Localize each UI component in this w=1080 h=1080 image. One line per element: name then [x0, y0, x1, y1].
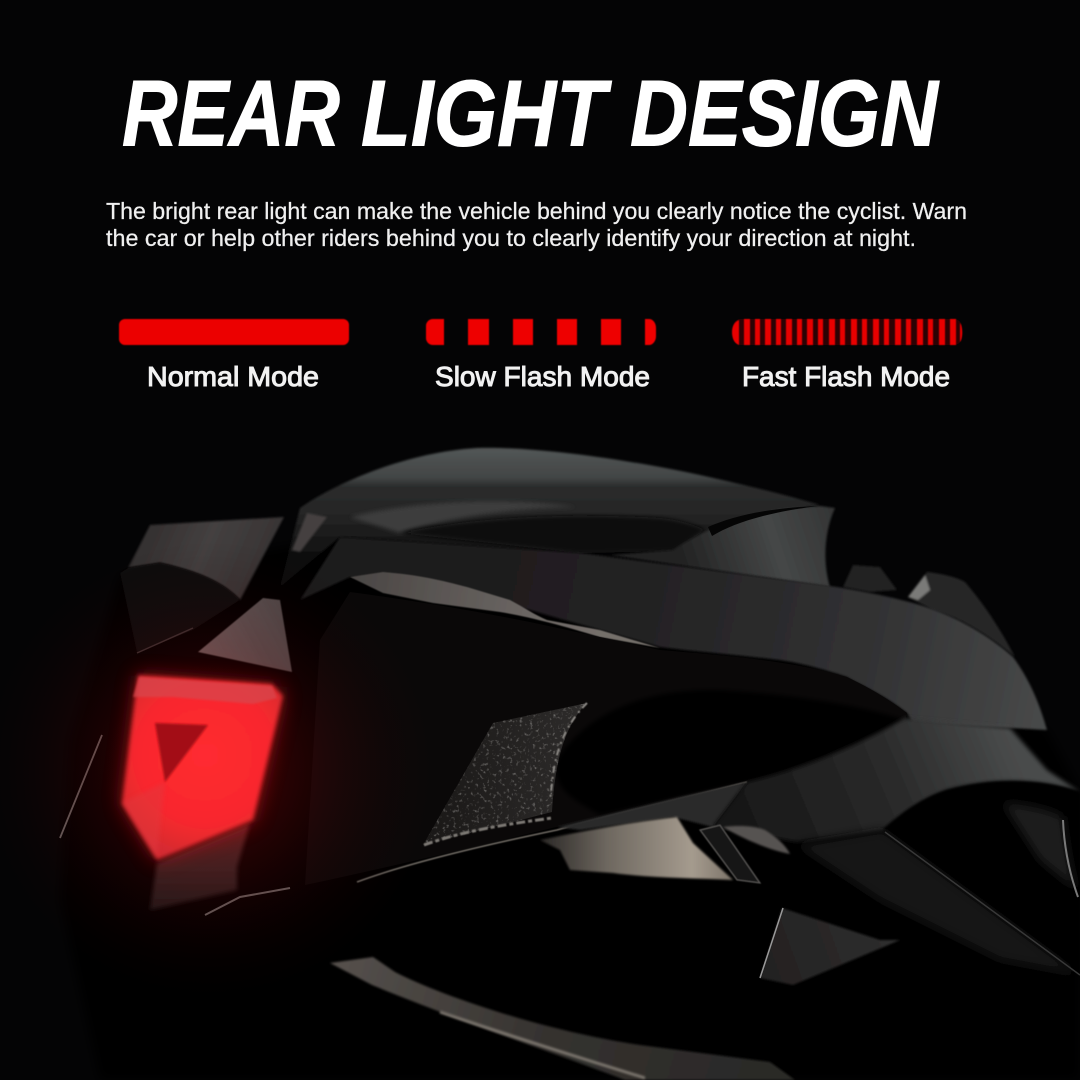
lens glow	[122, 675, 282, 860]
slow flash bar	[426, 319, 656, 345]
lower triangle edge	[760, 908, 783, 978]
rear right vent	[883, 781, 1080, 975]
gloss frame	[700, 825, 760, 883]
rim bright streak	[440, 1012, 645, 1078]
fast flash bar	[732, 319, 962, 345]
title: REAR	[122, 60, 340, 166]
left scratch highlight	[60, 735, 102, 838]
lower right band	[713, 718, 1080, 842]
lens bottom facet	[122, 782, 165, 858]
vent lower edge highlight	[357, 782, 747, 882]
main upper band	[300, 537, 1047, 730]
lens triangle	[155, 723, 208, 782]
speckle bright edge	[550, 703, 587, 800]
dome slit	[708, 506, 818, 536]
arm rear block	[843, 565, 897, 592]
title: DESIGN	[630, 60, 940, 166]
helmet photo illustration	[0, 448, 1080, 1080]
central vent panel	[305, 592, 907, 885]
inner vent surface	[1003, 803, 1077, 890]
description text	[106, 198, 967, 251]
slow flash label: Slow Flash Mode	[435, 361, 650, 392]
lower rim stripe	[330, 957, 795, 1080]
arm fin	[908, 572, 1015, 657]
mode: slow flash	[426, 319, 656, 392]
arm highlight	[908, 575, 930, 600]
wedge above gloss	[557, 782, 747, 830]
top dome	[280, 448, 820, 587]
band highlight	[350, 572, 660, 648]
left fin edge	[137, 628, 193, 653]
speckle lower edge	[424, 818, 552, 845]
dome lower stripe	[350, 501, 576, 533]
normal mode bar	[119, 319, 349, 345]
red ambient glow	[0, 540, 440, 1000]
title: LIGHT	[361, 60, 613, 166]
description text: the car or help other riders behind you to clearly identify your direction at night.	[106, 225, 916, 251]
diagonal lower wedge	[797, 830, 1080, 975]
right dome fin	[610, 506, 835, 587]
mode: fast flash	[732, 319, 962, 392]
helmet body base	[60, 537, 1080, 1080]
rear right vent edge	[1063, 820, 1078, 897]
glossy lower highlight	[540, 817, 733, 880]
left fin dark inner	[120, 563, 240, 653]
fast flash backing	[733, 319, 962, 345]
gloss shard	[723, 826, 790, 854]
fast flash label: Fast Flash Mode	[742, 361, 950, 392]
dark vent opening	[556, 690, 905, 815]
dome window	[292, 513, 327, 552]
diagonal edge	[885, 832, 1080, 975]
rear vent arm	[843, 565, 1015, 657]
speckled texture	[423, 704, 586, 845]
lower triangular vent	[760, 908, 900, 985]
normal mode label: Normal Mode	[147, 361, 319, 392]
left fin	[128, 517, 284, 600]
triangle facet above lens	[198, 598, 292, 672]
lens upper lip	[133, 677, 277, 704]
title	[122, 60, 940, 166]
mode: normal	[119, 319, 349, 392]
facet below lens	[150, 823, 250, 910]
dome inner shadow	[400, 516, 705, 553]
stem highlight	[205, 888, 290, 915]
description text: The bright rear light can make the vehicle behind you clearly notice the cyclist. Warn	[106, 198, 967, 224]
rear light lens	[122, 675, 283, 860]
